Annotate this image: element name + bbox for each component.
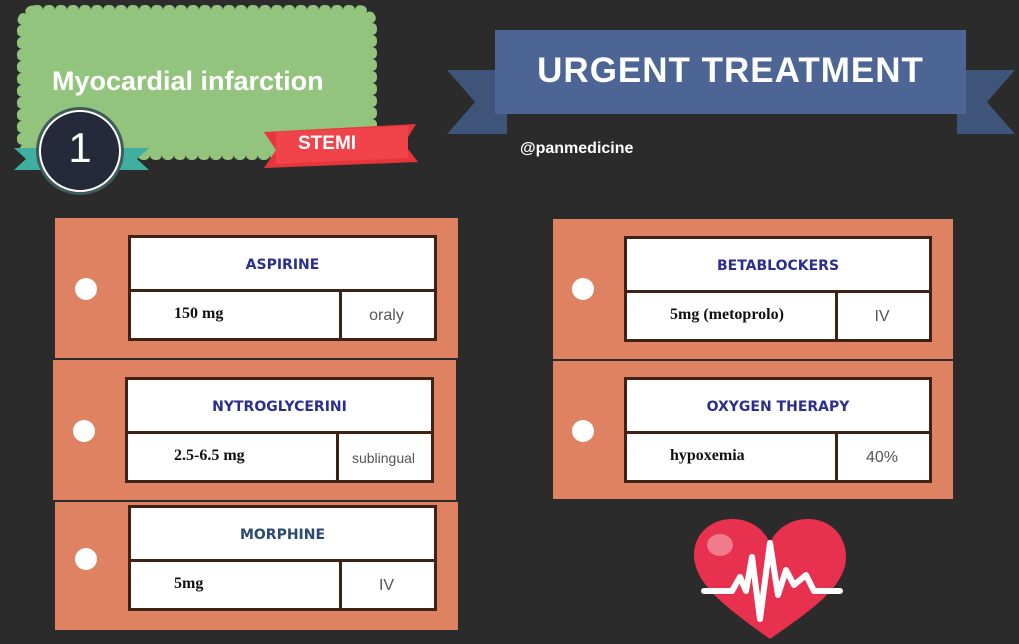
STEMI label: STEMI bbox=[298, 133, 356, 154]
card: morphine: 5mg bbox=[174, 575, 203, 592]
credit text: @panmedicine bbox=[520, 140, 633, 157]
card: aspirine: oraly bbox=[369, 307, 404, 324]
title text: Myocardial infarction bbox=[52, 66, 324, 96]
card: betablockers: IV bbox=[874, 308, 890, 325]
header badge: myocardial infarction bbox=[14, 5, 418, 195]
card: oxygen therapy: OXYGEN THERAPY bbox=[707, 399, 849, 415]
card: nytroglycerini: NYTROGLYCERINI bbox=[212, 399, 347, 415]
ribbon banner: urgent treatment: URGENT TREATMENT bbox=[537, 51, 924, 90]
card: aspirine: ASPIRINE bbox=[246, 257, 319, 273]
card: aspirine bbox=[55, 218, 458, 358]
number 1: 1 bbox=[68, 124, 92, 171]
card: nytroglycerini: sublingual bbox=[352, 450, 415, 466]
card: oxygen therapy: 40% bbox=[866, 449, 898, 466]
card: oxygen therapy: hypoxemia bbox=[670, 447, 745, 464]
ribbon banner: urgent treatment bbox=[447, 30, 1015, 134]
card: nytroglycerini: 2.5-6.5 mg bbox=[174, 447, 245, 464]
card: morphine: IV bbox=[379, 577, 394, 594]
card: betablockers: 5mg (metoprolo) bbox=[670, 306, 784, 323]
icon: heart with heartbeat bbox=[694, 519, 846, 639]
card: nytroglycerini bbox=[53, 360, 456, 500]
card: morphine: MORPHINE bbox=[240, 527, 325, 543]
card: oxygen therapy bbox=[553, 361, 953, 499]
card: morphine bbox=[55, 502, 458, 630]
card: betablockers: BETABLOCKERS bbox=[717, 258, 839, 274]
card: aspirine: 150 mg bbox=[174, 305, 223, 322]
card: betablockers bbox=[553, 219, 953, 359]
